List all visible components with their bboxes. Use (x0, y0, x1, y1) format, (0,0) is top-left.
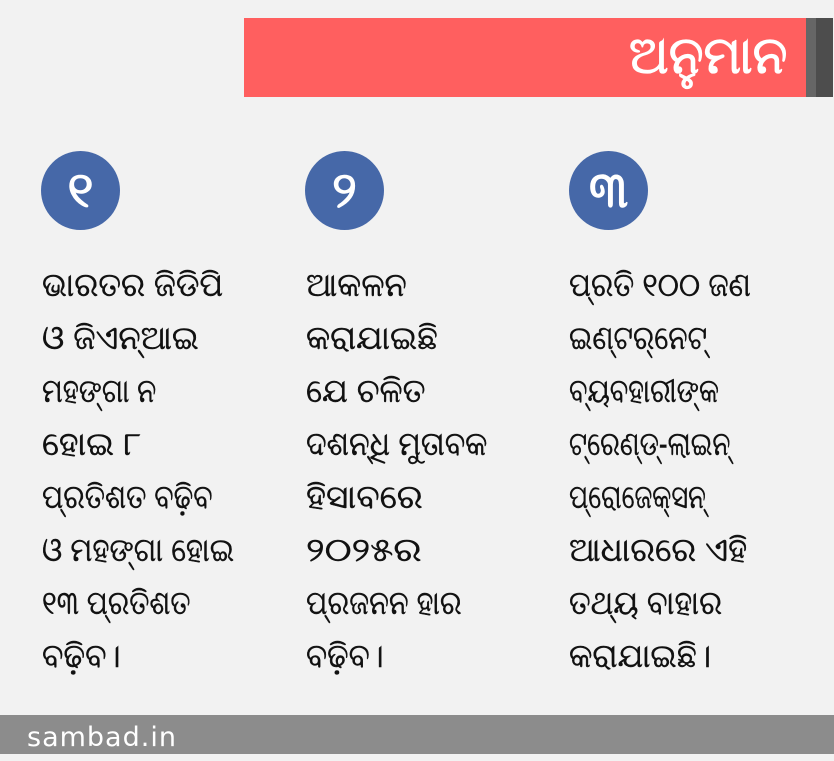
number badge 2: ୨ (332, 162, 357, 218)
column 1 text: ମହଙ୍ଗା ନ (42, 372, 156, 409)
banner title text: ଅନୁମାନ (628, 27, 787, 85)
column 3 text: ପ୍ରତି ୧୦୦ ଜଣ (569, 266, 751, 303)
column 2 text: ବଢ଼ିବ। (306, 637, 384, 674)
column 1 text: ହୋଇ ୮ (42, 425, 141, 462)
column 2 text: ଯେ ଚଳିତ (306, 372, 425, 409)
footer brand text: sambad.in (27, 722, 177, 753)
column 3 text: ଇଣ୍ଟର୍‌ନେଟ୍ (569, 319, 707, 356)
column 2 text: ହିସାବରେ (306, 478, 423, 515)
column 3 text (569, 266, 751, 674)
column 3 text: ଟ୍ରେଣ୍ଡ୍-ଲାଇନ୍ (569, 425, 730, 462)
column 3 text: ବ୍ୟବହାରୀଙ୍କ (569, 372, 719, 409)
footer bar (0, 715, 834, 754)
column 1 text (42, 266, 234, 675)
number badge 3 (569, 151, 648, 230)
column 1 text: ଓ ଜିଏନ୍ଆଇ (42, 319, 199, 356)
number badge 1 (41, 151, 120, 230)
column 3 text: ପ୍ରୋଜେକ୍ସନ୍ (569, 478, 706, 515)
number badge 2 (305, 151, 384, 230)
column 1 text: ପ୍ରତିଶତ ବଢ଼ିବ (42, 478, 213, 515)
title banner (244, 18, 833, 97)
column 2 text: ୨୦୨୫ର (306, 531, 422, 568)
column 1 text: ଭାରତର ଜିଡିପି (42, 266, 223, 303)
column 3 text: ତଥ୍ୟ ବାହାର (569, 584, 722, 621)
column 1 text: ୧୩ ପ୍ରତିଶତ (42, 584, 190, 621)
column 3 text: କରାଯାଇଛି। (569, 637, 711, 674)
column 3 text: ଆଧାରରେ ଏହି (569, 531, 747, 568)
banner end bar light (806, 18, 816, 97)
column 1 text: ଓ ମହଙ୍ଗା ହୋଇ (42, 531, 234, 568)
number badge 1: ୧ (67, 162, 94, 218)
column 2 text: କରାଯାଇଛି (306, 319, 438, 356)
column 1 text: ବଢ଼ିବ। (42, 637, 121, 674)
number badge 3: ୩ (589, 162, 628, 218)
column 2 text: ପ୍ରଜନନ ହାର (306, 584, 462, 621)
banner end bar dark (816, 18, 833, 97)
column 2 text (306, 266, 487, 675)
column 2 text: ଦଶନ୍ଧି ମୁତାବକ (306, 425, 487, 462)
column 2 text: ଆକଳନ (306, 266, 407, 303)
